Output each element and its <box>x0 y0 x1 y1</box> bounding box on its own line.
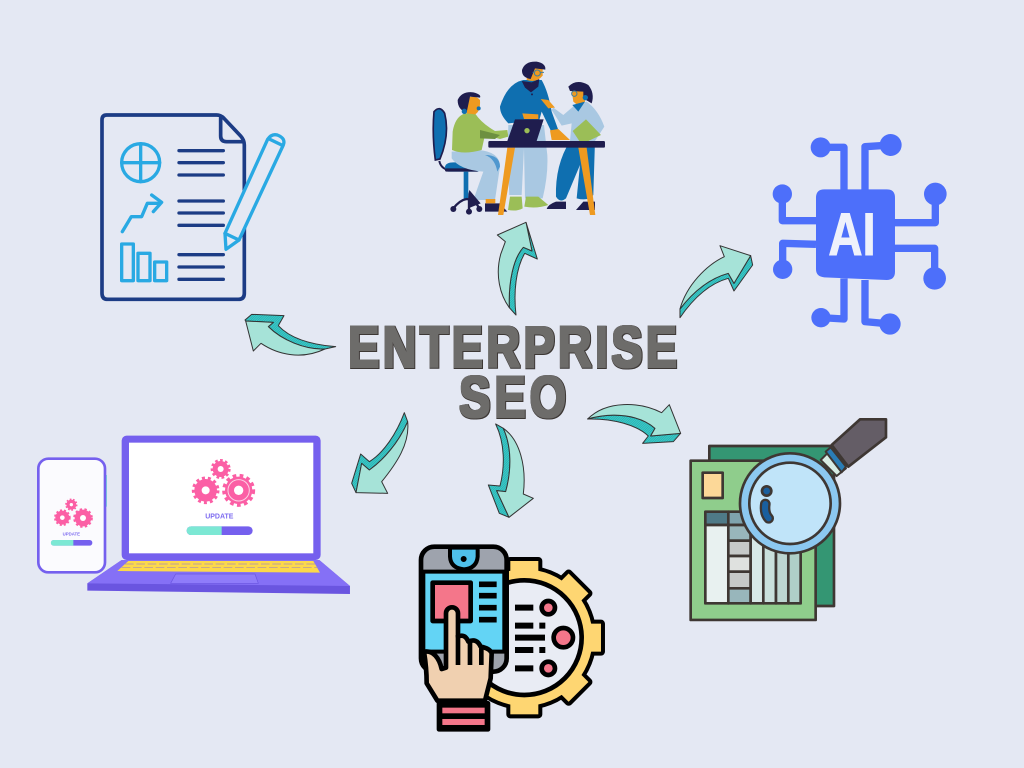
icon: phone, hand and gear <box>421 547 601 729</box>
seated person <box>452 92 508 212</box>
laptop: UPDATE <box>205 514 234 521</box>
phone: UPDATE <box>63 531 80 536</box>
chair <box>433 109 482 215</box>
gear <box>456 561 601 714</box>
phone <box>38 459 107 572</box>
magnifier handle <box>821 419 886 476</box>
gear contents <box>515 601 573 675</box>
standing woman <box>547 82 604 210</box>
arrow: to magnifier <box>588 405 681 443</box>
icon: AI chip <box>773 134 947 335</box>
desk with laptop <box>488 119 605 215</box>
spreadsheet table <box>705 512 801 603</box>
arrow: to AI <box>680 246 753 318</box>
hand <box>424 607 492 729</box>
laptop <box>87 436 350 594</box>
icon: team working at a desk <box>433 62 605 215</box>
icon: report document with pencil <box>102 115 284 299</box>
arrow: to report <box>245 314 336 355</box>
title: ENTERPRISE <box>348 315 677 380</box>
title <box>348 315 677 430</box>
arrow: to phone and gear <box>488 424 533 517</box>
icon: phone and laptop showing update screen <box>38 436 350 594</box>
magnifier lens <box>740 453 840 553</box>
phone <box>421 547 507 672</box>
standing person <box>500 62 570 211</box>
icon: magnifier over a spreadsheet <box>691 419 886 620</box>
icon: AI chip: AI <box>828 201 876 268</box>
arrow: to team <box>497 222 537 315</box>
arrow: to devices <box>352 413 408 493</box>
title: SEO <box>459 365 566 430</box>
